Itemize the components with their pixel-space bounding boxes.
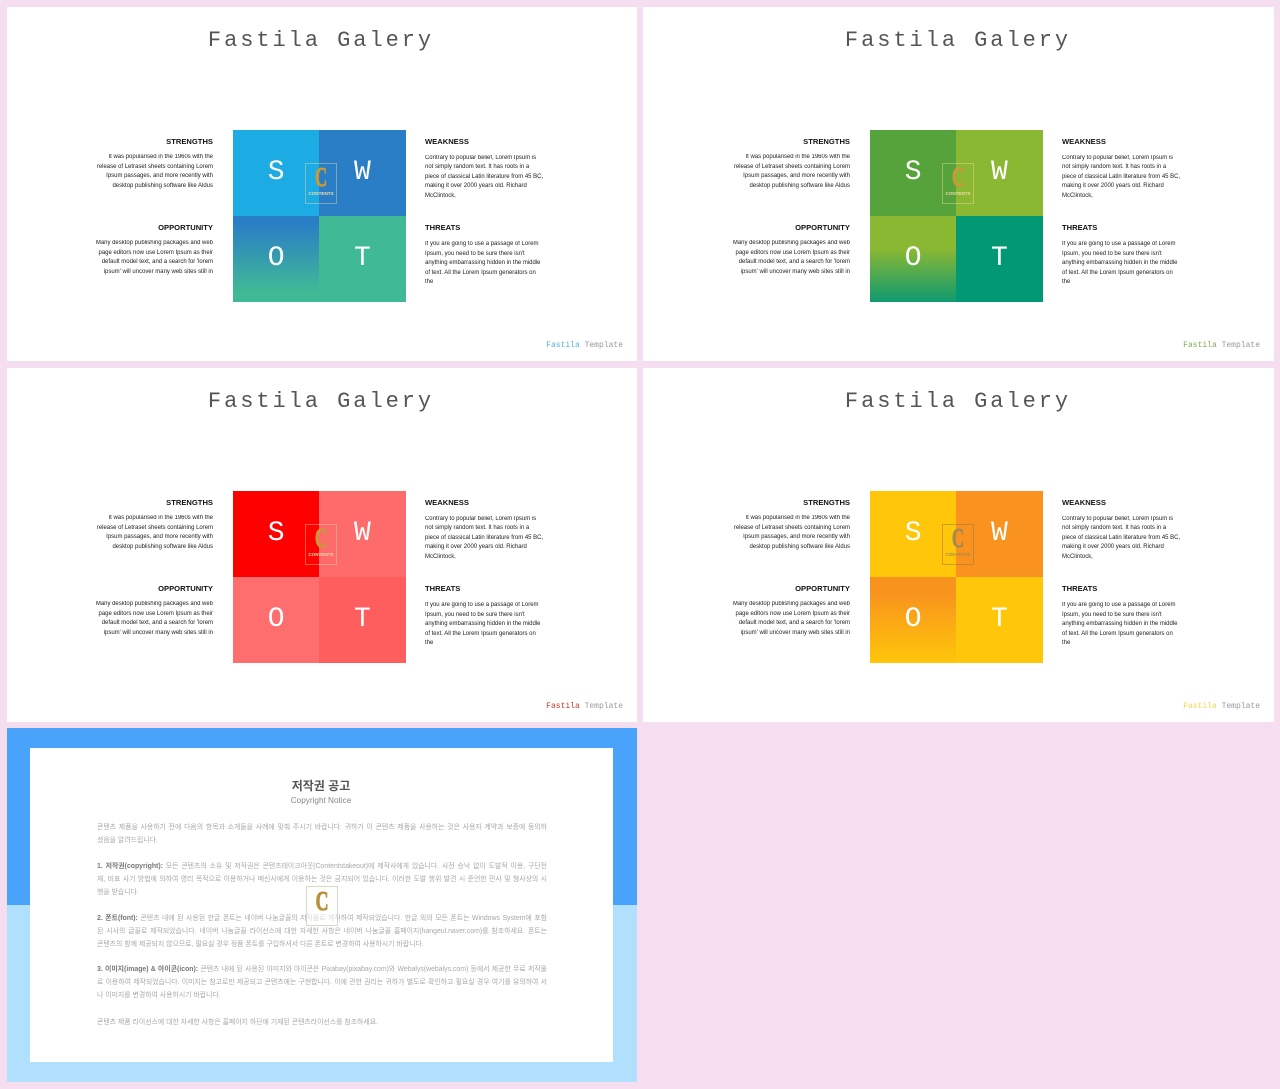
panel: green SWOT slide <box>643 7 1274 361</box>
text: strengths: Ipsum passages, and more recently with <box>743 534 850 540</box>
heading: weakness: WEAKNESS <box>1062 498 1106 507</box>
text: threats: Ipsum, you need to be sure there isn't <box>425 612 525 618</box>
heading: weakness: WEAKNESS <box>425 137 469 146</box>
text: weakness: not simply random text. It has roots in a <box>1062 525 1166 531</box>
quadrant T <box>956 216 1042 302</box>
text: opportunity: ipsum' will uncover many web sites still in <box>104 269 213 275</box>
license note: 콘텐츠 제품 라이선스에 대한 자세한 사항은 홈페이지 하단에 기재된 콘텐츠라이선스를 참조하세요. <box>97 1019 378 1026</box>
heading: strengths: STRENGTHS <box>803 137 850 146</box>
quadrant T: T <box>354 604 371 635</box>
text: opportunity: page editors now use Lorem Ipsum as their <box>99 250 213 256</box>
panel: copyright notice <box>7 728 637 1082</box>
text: weakness: Contrary to popular belief, Lorem Ipsum is <box>1062 516 1173 522</box>
icon: contents logo <box>942 163 974 204</box>
text: weakness: piece of classical Latin literature from 45 BC, <box>425 535 543 541</box>
quadrant T <box>319 577 406 663</box>
quadrant O: O <box>905 604 922 635</box>
text: strengths: desktop publishing software like Aldus <box>749 544 850 550</box>
footer label: Fastila Template <box>1183 702 1260 711</box>
heading: weakness: WEAKNESS <box>425 498 469 507</box>
text: weakness: McClintock, <box>1062 193 1093 199</box>
text: opportunity: Many desktop publishing packages and web <box>733 601 850 607</box>
icon: contents logo: CONTENTS <box>308 191 334 196</box>
text: opportunity: default model text, and a search for 'lorem <box>739 620 850 626</box>
text: threats: anything embarrassing hidden in the middle <box>425 621 540 627</box>
text: threats <box>425 602 540 646</box>
heading: weakness: WEAKNESS <box>1062 137 1106 146</box>
text: threats: Ipsum, you need to be sure there isn't <box>1062 612 1162 618</box>
heading: opportunity: OPPORTUNITY <box>158 223 213 232</box>
heading: strengths: STRENGTHS <box>166 137 213 146</box>
quadrant W: W <box>354 518 371 549</box>
text: threats: If you are going to use a passage of Lorem <box>1062 602 1175 608</box>
text: strengths: It was popularised in the 1960s with the <box>108 154 213 160</box>
text: opportunity: ipsum' will uncover many web sites still in <box>741 630 850 636</box>
quadrant S: S <box>905 518 922 549</box>
text: threats: anything embarrassing hidden in the middle <box>1062 621 1177 627</box>
quadrant O: O <box>268 604 285 635</box>
quadrant W <box>956 130 1042 216</box>
quadrant W: W <box>354 157 371 188</box>
text: threats: anything embarrassing hidden in the middle <box>425 260 540 266</box>
heading: threats: THREATS <box>425 223 460 232</box>
icon: contents logo <box>942 524 974 565</box>
text: strengths: Ipsum passages, and more recently with <box>106 534 213 540</box>
text: strengths: release of Letraset sheets containing Lorem <box>97 525 213 531</box>
section: copyright: 1. 저작권(copyright): 모든 콘텐츠의 소유 및 저작권은 콘텐츠테이크아웃(Contentstakeout)에 제작사에게 있습니다. 사전 승낙 없이 도발적 이용, 구단전 <box>97 863 547 870</box>
footer label: Fastila Template <box>1183 341 1260 350</box>
quadrant T: T <box>991 604 1008 635</box>
text: threats: Ipsum, you need to be sure there isn't <box>425 251 525 257</box>
text: weakness: making it over 2000 years old. Richard <box>1062 183 1164 189</box>
panel: yellow SWOT slide <box>643 368 1274 722</box>
title: Fastila Galery <box>208 388 434 414</box>
quadrant S: S <box>268 518 285 549</box>
text: strengths: release of Letraset sheets containing Lorem <box>734 164 850 170</box>
text: strengths: It was popularised in the 1960s with the <box>745 154 850 160</box>
section: image and icon: 3. 이미지(image) & 아이콘(icon): 콘텐츠 내에 된 사용된 이미지와 아이콘은 Pixabay(pixabay.com)와 Webalys(webalys.com) 등에서 제공한 무료 저작물 <box>97 966 547 973</box>
section: image and icon <box>97 965 547 999</box>
quadrant W <box>319 130 406 216</box>
text: strengths: Ipsum passages, and more recently with <box>106 173 213 179</box>
text: strengths: desktop publishing software like Aldus <box>749 183 850 189</box>
text: strengths: desktop publishing software like Aldus <box>112 183 213 189</box>
text: strengths: desktop publishing software like Aldus <box>112 544 213 550</box>
quadrant W <box>319 491 406 577</box>
footer label: Fastila Template <box>546 702 623 711</box>
text: opportunity: default model text, and a search for 'lorem <box>739 259 850 265</box>
SWOT grid <box>870 491 1043 663</box>
section: font <box>97 914 547 948</box>
heading: opportunity: OPPORTUNITY <box>795 223 850 232</box>
text: weakness: not simply random text. It has roots in a <box>425 164 529 170</box>
text: opportunity: Many desktop publishing packages and web <box>96 240 213 246</box>
text: weakness: making it over 2000 years old. Richard <box>1062 544 1164 550</box>
icon: contents logo: C <box>316 886 328 916</box>
text: strengths <box>734 154 850 189</box>
footer label: Fastila Template <box>546 341 623 350</box>
panel: blue SWOT slide <box>7 7 637 361</box>
quadrant S <box>233 491 319 577</box>
text: strengths: Ipsum passages, and more recently with <box>743 173 850 179</box>
text: weakness: not simply random text. It has roots in a <box>1062 164 1166 170</box>
quadrant O <box>870 216 956 302</box>
SWOT grid <box>870 130 1043 302</box>
quadrant W <box>956 491 1042 577</box>
text: weakness: McClintock, <box>1062 554 1093 560</box>
text: threats: anything embarrassing hidden in the middle <box>1062 260 1177 266</box>
notice subtitle: Copyright Notice <box>291 796 351 805</box>
text: opportunity: ipsum' will uncover many web sites still in <box>741 269 850 275</box>
text: opportunity: default model text, and a search for 'lorem <box>102 259 213 265</box>
SWOT grid <box>233 491 406 663</box>
quadrant T <box>319 216 406 302</box>
quadrant S: S <box>268 157 285 188</box>
section: image and icon: 로 이용하여 제작되었습니다. 이미지는 참고로만 제공되고 콘텐츠에는 구현합니다. 이에 관한 권리는 귀하가 별도로 확인하고 필요실 경우 여기를 유의하여 서 <box>97 979 547 986</box>
text: opportunity <box>733 240 850 275</box>
heading: threats: THREATS <box>1062 223 1097 232</box>
quadrant O <box>233 577 319 663</box>
text: weakness: making it over 2000 years old. Richard <box>425 183 527 189</box>
text: weakness: Contrary to popular belief, Lorem Ipsum is <box>1062 154 1173 160</box>
text: threats: of text. All the Lorem Ipsum generators on <box>1062 270 1173 276</box>
section: copyright: 재, 비표 사기 방법에 의하여 영리 목적으로 이용하거나 배신사에게 이용하는 것은 금지되어 있습니다. 이러한 도발 행위 발견 시 준언한 민사 및 형사상의 시 <box>97 876 547 883</box>
title: Fastila Galery <box>845 28 1071 52</box>
quadrant O <box>870 577 956 663</box>
title: Fastila Galery <box>845 388 1071 414</box>
text: opportunity: page editors now use Lorem Ipsum as their <box>736 611 850 617</box>
icon: contents logo: CONTENTS <box>945 552 971 557</box>
text: threats: of text. All the Lorem Ipsum generators on <box>425 631 536 637</box>
section: copyright: 행을 받습니다. <box>97 889 139 896</box>
icon: contents logo <box>305 524 337 565</box>
quadrant W: W <box>991 157 1008 188</box>
quadrant T: T <box>354 243 371 274</box>
intro text: 콘텐츠 제품을 사용하기 전에 다음의 항목과 소개들을 사례에 맞춰 주시기 바랍니다. 귀하가 이 콘텐츠 제품을 사용하는 것은 사용자 계약과 보증에 동의하 <box>97 824 547 830</box>
section: copyright <box>97 862 547 896</box>
text: threats: of text. All the Lorem Ipsum generators on <box>425 270 536 276</box>
heading: opportunity: OPPORTUNITY <box>795 584 850 593</box>
text: weakness <box>1062 154 1180 199</box>
quadrant S <box>870 491 956 577</box>
section: font: 2. 폰트(font): 콘텐츠 내에 된 사용된 한글 폰트는 네이버 나눔글꼴의 저작물로 제작하여 제작되었습니다. 한글 외의 모든 폰트는 Windows System에 포함 <box>97 915 547 922</box>
icon: contents logo <box>306 886 338 926</box>
intro text <box>97 823 547 844</box>
heading: opportunity: OPPORTUNITY <box>158 584 213 593</box>
text: opportunity: Many desktop publishing packages and web <box>733 240 850 246</box>
text: weakness: making it over 2000 years old. Richard <box>425 544 527 550</box>
text: opportunity <box>733 601 850 636</box>
quadrant W: W <box>991 518 1008 549</box>
section: font: 된 시사의 글꼴로 제작되었습니다. 네이버 나눔글꼴 라이선스에 대한 자세한 사항은 네이버 나눔글꼴 홈페이지(hangeul.naver.com)를 참조하세요. 폰트는 <box>97 928 547 935</box>
text: threats: If you are going to use a passage of Lorem <box>425 241 538 247</box>
SWOT grid <box>233 130 406 302</box>
text: strengths: release of Letraset sheets containing Lorem <box>97 164 213 170</box>
heading: strengths: STRENGTHS <box>803 498 850 507</box>
quadrant S: S <box>905 157 922 188</box>
text: opportunity <box>96 240 213 275</box>
text: threats: If you are going to use a passage of Lorem <box>425 602 538 608</box>
text: strengths: It was popularised in the 1960s with the <box>745 515 850 521</box>
text: threats: Ipsum, you need to be sure there isn't <box>1062 251 1162 257</box>
text: threats: the <box>425 279 433 285</box>
text: weakness <box>1062 516 1180 560</box>
quadrant T: T <box>991 243 1008 274</box>
notice title: 저작권 공고 <box>292 779 350 793</box>
quadrant S <box>233 130 319 216</box>
section: font: 콘텐츠의 함께 제공되지 않으므로, 필요실 경우 정품 폰트를 구입하셔서 다른 폰트로 변경하여 사용하시기 바랍니다. <box>97 941 424 948</box>
quadrant T <box>956 577 1042 663</box>
text: threats: the <box>1062 640 1070 646</box>
panel: red SWOT slide <box>7 368 637 722</box>
text: strengths <box>97 515 213 550</box>
intro text: 셨음을 알려드립니다. <box>97 836 158 844</box>
text: weakness: McClintock, <box>425 554 456 560</box>
text: threats: the <box>425 640 433 646</box>
quadrant O: O <box>268 243 285 274</box>
text: weakness: piece of classical Latin literature from 45 BC, <box>425 174 543 180</box>
text: weakness: McClintock, <box>425 193 456 199</box>
text: threats <box>425 241 540 285</box>
heading: threats: THREATS <box>1062 584 1097 593</box>
heading: strengths: STRENGTHS <box>166 498 213 507</box>
text: threats: the <box>1062 279 1070 285</box>
text: weakness: piece of classical Latin literature from 45 BC, <box>1062 174 1180 180</box>
icon: contents logo: CONTENTS <box>945 191 971 196</box>
text: weakness: Contrary to popular belief, Lorem Ipsum is <box>425 516 536 522</box>
title: Fastila Galery <box>208 28 434 52</box>
text: threats <box>1062 602 1178 646</box>
quadrant S <box>870 130 956 216</box>
text: strengths <box>734 515 850 550</box>
text: strengths: It was popularised in the 1960s with the <box>108 515 213 521</box>
text: opportunity: page editors now use Lorem Ipsum as their <box>736 250 850 256</box>
text: weakness: not simply random text. It has roots in a <box>425 525 529 531</box>
section: image and icon: 나 이미지를 변경하여 사용하시기 바랍니다. <box>97 992 221 999</box>
text: opportunity: default model text, and a search for 'lorem <box>102 620 213 626</box>
icon: contents logo: CONTENTS <box>308 552 334 557</box>
text: opportunity <box>96 601 213 636</box>
quadrant O <box>233 216 319 302</box>
text: strengths <box>97 154 213 189</box>
text: weakness: Contrary to popular belief, Lorem Ipsum is <box>425 154 536 160</box>
text: opportunity: ipsum' will uncover many web sites still in <box>104 630 213 636</box>
text: weakness <box>425 154 543 199</box>
text: opportunity: Many desktop publishing packages and web <box>96 601 213 607</box>
text: opportunity: page editors now use Lorem Ipsum as their <box>99 611 213 617</box>
text: weakness: piece of classical Latin literature from 45 BC, <box>1062 535 1180 541</box>
icon: contents logo <box>305 163 337 204</box>
heading: threats: THREATS <box>425 584 460 593</box>
text: threats <box>1062 241 1178 285</box>
text: threats: If you are going to use a passage of Lorem <box>1062 241 1175 247</box>
text: threats: of text. All the Lorem Ipsum generators on <box>1062 631 1173 637</box>
text: weakness <box>425 516 543 560</box>
notice card <box>30 748 613 1062</box>
text: strengths: release of Letraset sheets containing Lorem <box>734 525 850 531</box>
quadrant O: O <box>905 243 922 274</box>
